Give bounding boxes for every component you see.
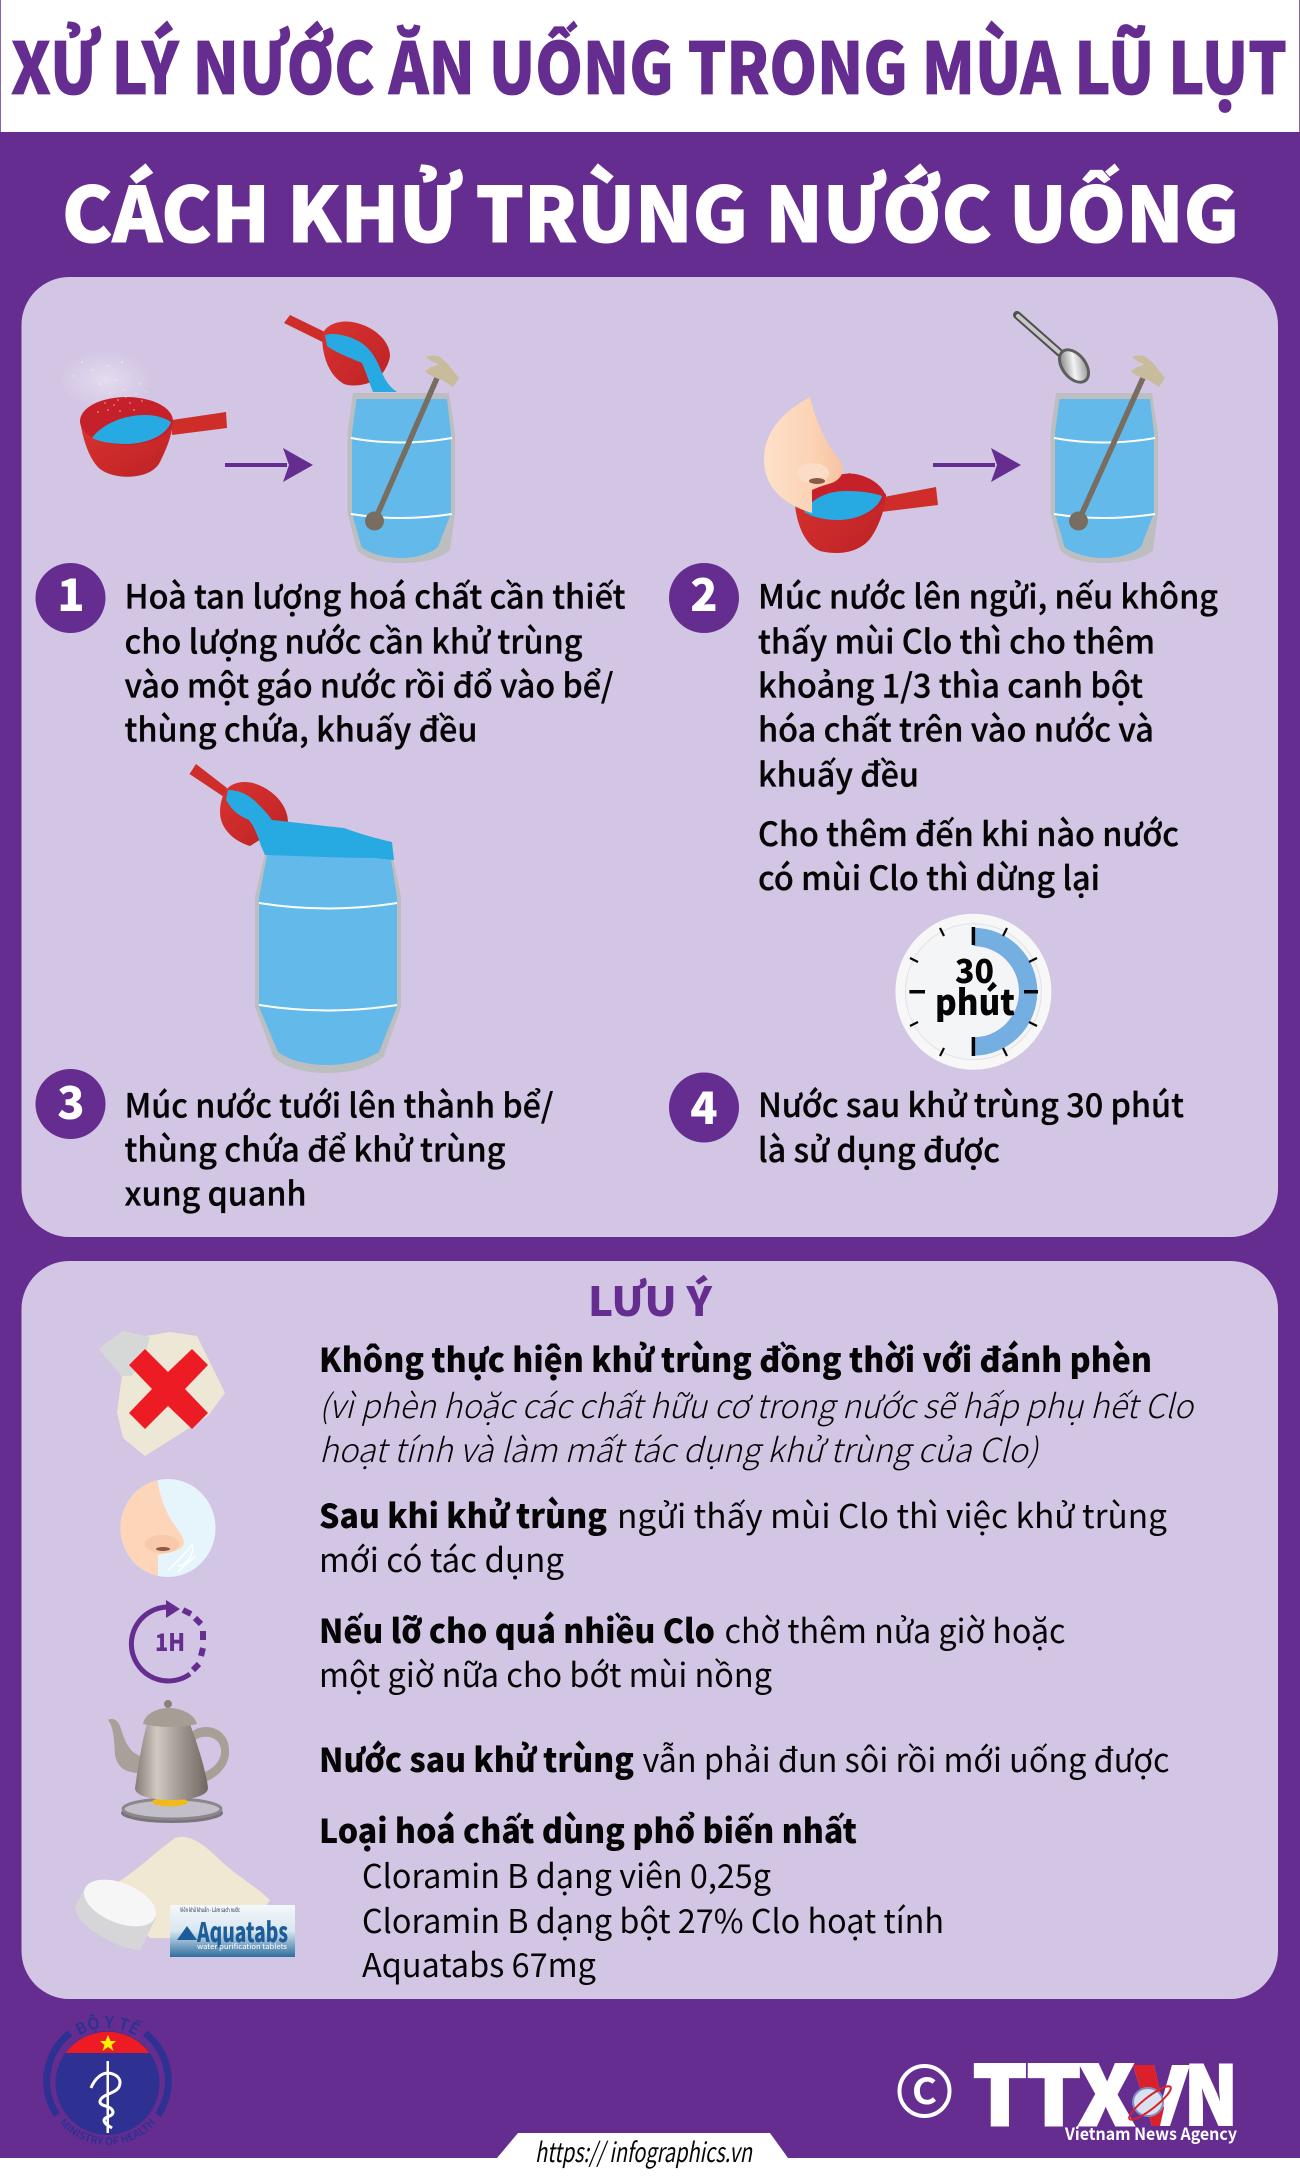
icon: bucket with stirring stick (348, 356, 459, 563)
note 2 text: ngửi thấy mùi Clo thì việc khử trùng (617, 1490, 1167, 1538)
step 2 text: khoảng 1/3 thìa canh bột (758, 660, 1143, 708)
step 2 text: Cho thêm đến khi nào nước (758, 808, 1179, 856)
step 1 text: Hoà tan lượng hoá chất cần thiết (124, 570, 626, 618)
icon: chemicals powder, tablet and Aquatabs box: water purification tablets (197, 1942, 288, 1952)
icon: spoon (1017, 315, 1097, 390)
icon: one hour clock: 1H (155, 1623, 185, 1658)
note 1 text (319, 1334, 1195, 1472)
logo: ministry of health: BỘ Y TẾ (75, 2014, 143, 2036)
step 4 text: là sử dụng được (758, 1124, 1000, 1172)
note 5 text (319, 1805, 944, 1987)
top border (0, 0, 1300, 132)
step 1 text: cho lượng nước cần khử trùng (124, 616, 582, 664)
icon: 30 minute timer: phút (935, 975, 1015, 1026)
step 2 text: khuấy đều (758, 748, 919, 796)
step number 4: 4 (690, 1072, 718, 1137)
icon: ladle pouring (284, 315, 397, 392)
step 2 text: thấy mùi Clo thì cho thêm (758, 616, 1155, 664)
icon: ladle with powder (60, 350, 227, 477)
logo: TTXVN: C (912, 2063, 937, 2115)
logo: TTXVN (900, 2032, 1238, 2149)
note 1 text: (vì phèn hoặc các chất hữu cơ trong nước sẽ hấp phụ hết Clo (319, 1380, 1195, 1428)
icon: kettle on stove (108, 1700, 229, 1823)
icon: chemicals powder, tablet and Aquatabs box (75, 1837, 295, 1957)
step number 3: 3 (57, 1067, 85, 1132)
step 2 text: Múc nước lên ngửi, nếu không (758, 570, 1218, 618)
logo: TTXVN: TTX (973, 2032, 1134, 2149)
note 5 text: Cloramin B dạng viên 0,25g (362, 1850, 771, 1898)
panel: notes (22, 1261, 1278, 1999)
icon: chemicals powder, tablet and Aquatabs box: Viên khử khuẩn - Làm sạch nước (180, 1905, 240, 1914)
step 3 text: Múc nước tưới lên thành bể/ (124, 1080, 554, 1128)
step number 3 (36, 1067, 106, 1139)
icon: nose (115, 1478, 216, 1580)
icon: one hour clock (131, 1600, 203, 1681)
step number 4 (669, 1072, 739, 1142)
icon: chemicals powder, tablet and Aquatabs box: Aquatabs (196, 1911, 288, 1950)
note 2 text: Sau khi khử trùng (319, 1490, 607, 1538)
note 4 text: Nước sau khử trùng (319, 1734, 634, 1782)
note 4 text (319, 1734, 1170, 1782)
arrow: step 1 (225, 448, 313, 482)
icon: bucket with stirring stick 2 (1050, 356, 1165, 563)
step 3 text (124, 1080, 554, 1216)
note 5 text: Aquatabs 67mg (362, 1939, 596, 1987)
step number 2 (669, 559, 739, 633)
note 2 text: mới có tác dụng (319, 1534, 564, 1582)
note 4 text: vẫn phải đun sôi rồi mới uống được (642, 1734, 1170, 1782)
step 4 text (758, 1079, 1184, 1172)
note 3 text: một giờ nữa cho bớt mùi nồng (319, 1649, 772, 1697)
icon: 30 minute timer (895, 914, 1051, 1070)
step 2 text: có mùi Clo thì dừng lại (758, 852, 1100, 900)
icon: nose smelling ladle (764, 397, 938, 553)
logo: ministry of health (43, 2014, 172, 2146)
step 3 text: thùng chứa để khử trùng (124, 1124, 506, 1172)
note 2 text (319, 1490, 1167, 1582)
step 2 text (758, 570, 1218, 900)
arrow: step 2 (933, 448, 1021, 482)
subtitle: CÁCH KHỬ TRÙNG NƯỚC UỐNG (62, 154, 1239, 264)
note 5 text: Cloramin B dạng bột 27% Clo hoạt tính (362, 1895, 944, 1943)
footer url tab: https:// infographics.vn (535, 2131, 753, 2170)
step number 1: 1 (57, 559, 85, 624)
step 1 text: thùng chứa, khuấy đều (124, 704, 478, 752)
panel: steps (22, 277, 1278, 1237)
logo: TTXVN: N (1184, 2032, 1238, 2149)
note 1 text: Không thực hiện khử trùng đồng thời với đánh phèn (319, 1334, 1152, 1382)
icon: large bucket with water poured (190, 764, 401, 1073)
step 4 text: Nước sau khử trùng 30 phút (758, 1079, 1184, 1127)
step 2 text: hóa chất trên vào nước và (758, 704, 1154, 752)
heading: notes: LƯU Ý (588, 1270, 713, 1328)
note 5 text: Loại hoá chất dùng phổ biến nhất (319, 1805, 857, 1853)
note 3 text: Nếu lỡ cho quá nhiều Clo (319, 1605, 715, 1653)
step number 1 (36, 559, 106, 633)
step 3 text: xung quanh (124, 1168, 306, 1216)
step number 2: 2 (690, 559, 718, 624)
logo: ministry of health: MINISTRY OF HEALTH (60, 2118, 155, 2146)
step 1 text (124, 570, 626, 752)
note 3 text: chờ thêm nửa giờ hoặc (724, 1605, 1066, 1653)
note 1 text: hoạt tính và làm mất tác dụng khử trùng của Clo) (319, 1424, 1040, 1472)
icon: 30 minute timer: 30 (955, 945, 994, 993)
icon: alum crossed out (99, 1331, 225, 1456)
step 1 text: vào một gáo nước rồi đổ vào bể/ (124, 660, 614, 708)
logo: TTXVN: Vietnam News Agency (1064, 2120, 1237, 2145)
note 3 text (319, 1605, 1066, 1697)
